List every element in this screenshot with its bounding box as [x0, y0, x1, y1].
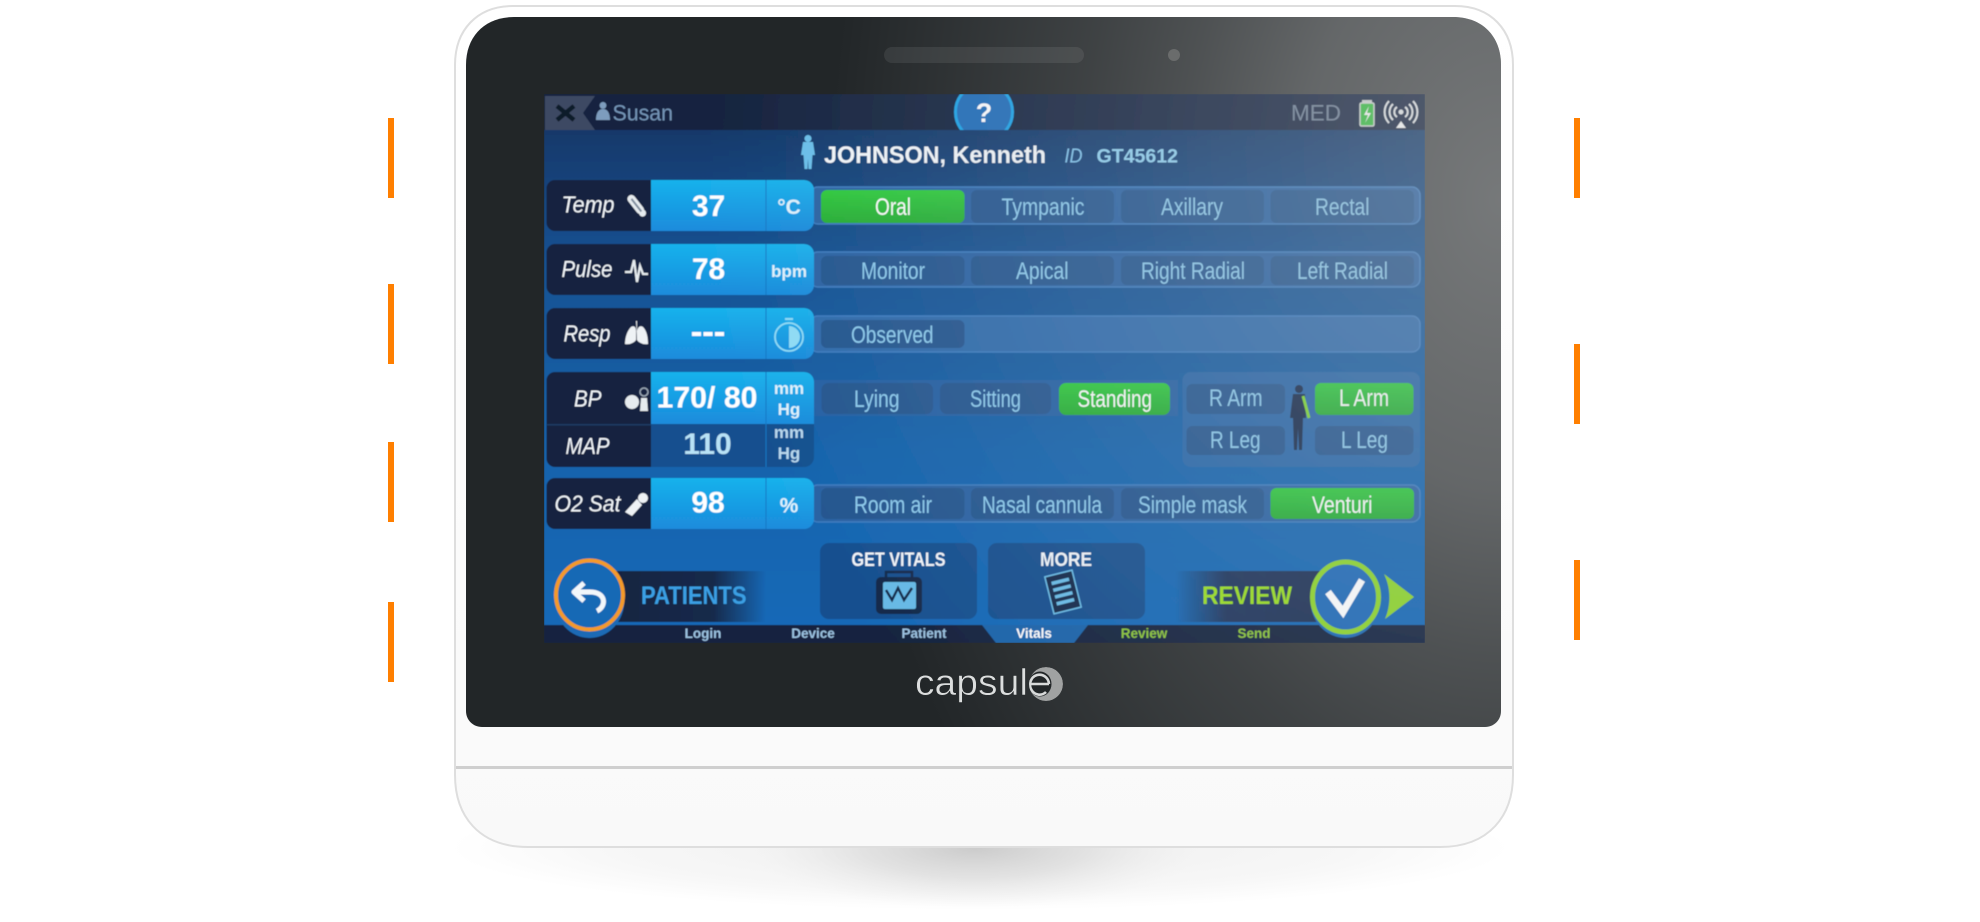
row: Temp: Axillary — [1161, 194, 1223, 221]
label block — [546, 372, 651, 467]
row: Temp — [546, 180, 1420, 231]
patient figure icon — [801, 135, 815, 169]
review next button: REVIEW — [1202, 582, 1292, 610]
row: Pulse: Left Radial — [1297, 258, 1388, 285]
row: Temp: Rectal — [1315, 194, 1370, 221]
speaker slot — [884, 47, 1084, 63]
label block — [546, 180, 651, 231]
row: O2 Sat: Nasal cannula — [982, 492, 1103, 519]
row: Temp: Temp — [562, 192, 615, 218]
row: Pulse: Right Radial — [1141, 258, 1245, 285]
value block — [651, 180, 814, 231]
document icon — [1045, 570, 1081, 614]
label block — [546, 308, 651, 359]
patients back button: PATIENTS — [641, 582, 746, 610]
row: BP and MAP: 110 — [683, 428, 732, 461]
position strip — [812, 380, 1178, 416]
orange marker: left 3 — [388, 442, 394, 522]
label block — [546, 244, 651, 295]
row: Resp — [546, 308, 1420, 359]
row: Temp: 37 — [692, 190, 725, 223]
review next button — [1175, 562, 1414, 638]
row: O2 Sat: 98 — [691, 486, 725, 520]
thermometer icon — [626, 194, 647, 218]
next arrow — [1384, 574, 1414, 619]
user: Susan: Susan — [612, 100, 673, 126]
patient id: GT45612 — [1096, 146, 1178, 168]
row: Temp: Tympanic — [1002, 194, 1084, 221]
dark bezel — [466, 17, 1501, 727]
value block — [651, 478, 814, 529]
bottom progress bar: Review — [1121, 626, 1168, 641]
bottom progress bar: Device — [791, 626, 835, 641]
row: BP and MAP: Hg — [778, 444, 800, 463]
row: O2 Sat: Room air — [854, 492, 932, 519]
row: Pulse — [546, 244, 1420, 295]
row: BP and MAP: Standing — [1078, 386, 1152, 413]
row: BP and MAP: MAP — [566, 433, 610, 459]
orange marker: left 1 — [388, 118, 394, 198]
battery icon — [1360, 100, 1374, 126]
current step tab — [982, 625, 1088, 643]
orange marker: right 1 — [1574, 118, 1580, 198]
row: Pulse: 78 — [692, 253, 725, 286]
position buttons — [822, 383, 933, 414]
row: O2 Sat: Venturi — [1312, 492, 1372, 519]
wireless icon — [1385, 101, 1417, 128]
options strip — [810, 316, 1420, 352]
help button: ? — [976, 98, 992, 128]
row: BP and MAP: mm — [774, 423, 804, 442]
label block — [546, 478, 651, 529]
row: BP and MAP: Lying — [854, 386, 900, 413]
screen background — [544, 94, 1425, 643]
capsule logo — [916, 667, 1063, 702]
patient id — [1064, 148, 1178, 164]
row: BP and MAP: 170/ 80 — [656, 382, 758, 414]
orange marker: left 4 — [388, 602, 394, 682]
row: O2 Sat: Simple mask — [1138, 492, 1248, 519]
get vitals button: GET VITALS — [852, 550, 946, 571]
check mark — [1328, 580, 1362, 612]
row: Resp: Resp — [564, 320, 611, 346]
bottom progress bar: Vitals — [1016, 626, 1052, 641]
help button — [953, 94, 1015, 131]
bottom progress bar — [544, 625, 1425, 643]
shell seam — [456, 766, 1512, 769]
options strip — [810, 187, 1420, 224]
timer icon — [775, 319, 803, 351]
cuff icon — [625, 388, 648, 411]
monitor icon — [876, 572, 922, 614]
limb selector panel — [1182, 372, 1420, 467]
device white shell — [455, 6, 1513, 847]
MED label: MED — [1291, 100, 1341, 126]
row: BP and MAP: Sitting — [970, 386, 1021, 413]
row: BP and MAP: Hg — [778, 400, 800, 419]
option buttons — [821, 190, 964, 223]
BP value block — [651, 372, 814, 424]
top status bar — [544, 94, 1425, 130]
bottom progress bar: Login — [685, 626, 721, 641]
patients back button — [554, 560, 766, 638]
close button — [545, 96, 595, 130]
bottom progress bar: Send — [1237, 626, 1271, 641]
limb selector panel: R Arm — [1209, 385, 1262, 412]
limb selector panel: R Leg — [1210, 427, 1260, 454]
row: BP and MAP: mm — [774, 379, 804, 398]
capsule logo: capsul — [915, 662, 1028, 703]
row: Pulse: Pulse — [562, 256, 612, 282]
value block — [651, 308, 814, 359]
orange marker: right 2 — [1574, 344, 1580, 424]
option button — [821, 320, 964, 348]
orange marker: right 3 — [1574, 560, 1580, 640]
value block — [651, 244, 814, 295]
options strip — [810, 485, 1420, 522]
finger clip icon — [625, 493, 648, 516]
row: Temp: Oral — [875, 194, 911, 221]
limb selector panel: L Leg — [1341, 427, 1388, 454]
get vitals button — [820, 543, 977, 619]
bottom progress bar: Patient — [901, 626, 947, 641]
body figure icon — [1290, 385, 1306, 450]
bezel reflection — [466, 17, 1501, 727]
orange marker: left 2 — [388, 284, 394, 364]
row: Pulse: Monitor — [861, 258, 925, 285]
device drop shadow — [450, 786, 1510, 910]
limb selector panel: L Arm — [1339, 385, 1389, 412]
patient id: ID — [1064, 146, 1082, 168]
row: Resp: Observed — [851, 322, 934, 349]
screen glare — [544, 94, 1425, 643]
back arrow — [574, 583, 603, 611]
row: Pulse: bpm — [771, 262, 807, 281]
option buttons — [821, 256, 964, 285]
row: BP and MAP — [546, 372, 1420, 467]
more button — [988, 543, 1145, 619]
camera dot — [1168, 49, 1180, 61]
heartbeat icon — [625, 260, 648, 282]
tablet device — [455, 6, 1513, 847]
row: O2 Sat: O2 Sat — [554, 490, 622, 516]
option buttons — [821, 488, 964, 519]
row: BP and MAP: BP — [574, 386, 602, 412]
options strip — [810, 252, 1420, 287]
row: Temp: °C — [777, 196, 801, 219]
MAP value block — [651, 424, 814, 467]
row: O2 Sat — [546, 478, 1420, 529]
user: Susan — [595, 101, 672, 122]
more button: MORE — [1040, 550, 1092, 571]
patient name: JOHNSON, Kenneth — [824, 142, 1046, 169]
lungs icon — [625, 321, 648, 344]
row: O2 Sat: % — [780, 494, 799, 518]
patient header — [801, 135, 1178, 169]
row: Pulse: Apical — [1016, 258, 1068, 285]
touch screen — [544, 84, 1425, 643]
